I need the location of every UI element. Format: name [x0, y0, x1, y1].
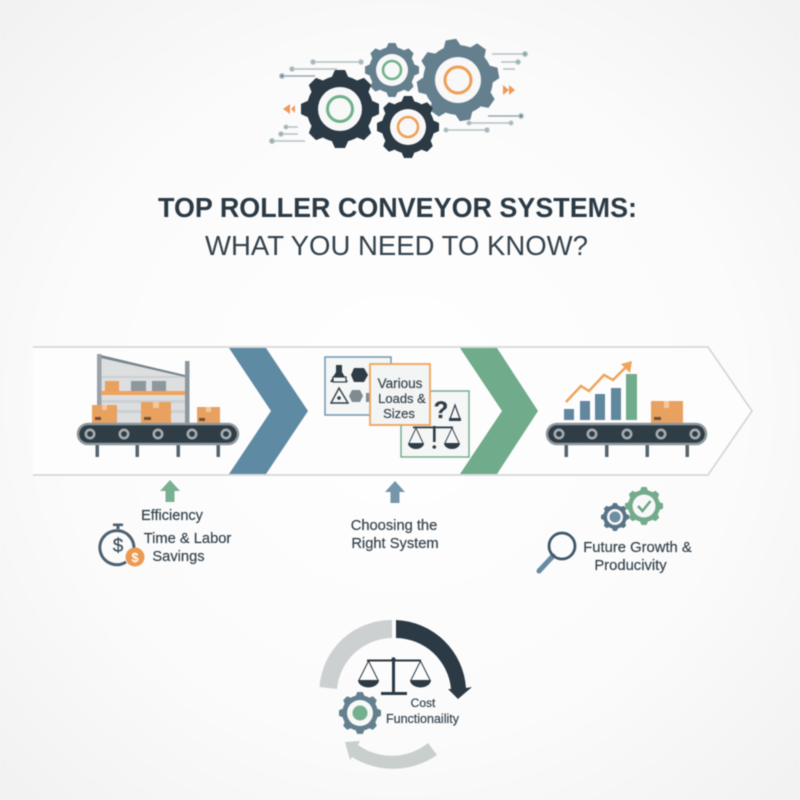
illustration: growth conveyor [547, 361, 706, 457]
text: choosing the right system [351, 518, 439, 552]
card: various loads and sizes: Loads & [378, 391, 426, 406]
title: WHAT YOU NEED TO KNOW? [205, 230, 588, 261]
gear: top middle [365, 43, 419, 97]
conveyor belt [78, 424, 238, 444]
gear: bottom dark [377, 96, 439, 158]
icon: orange arrows right [503, 85, 515, 95]
text: time and labor savings: Savings [152, 549, 205, 565]
text: time and labor savings [144, 531, 231, 565]
arrow: blue up [385, 481, 405, 503]
icon: balance scale [358, 657, 431, 695]
package [651, 401, 683, 423]
title: TOP ROLLER CONVEYOR SYSTEMS: [158, 192, 637, 223]
card: various loads and sizes: Various [378, 376, 423, 391]
arrow: growth trend [566, 361, 632, 402]
icon: magnifier [539, 533, 575, 571]
icon: stopwatch with coin [100, 524, 144, 566]
icon: stopwatch with coin: $ [113, 536, 124, 557]
arc: dark arrow [396, 620, 472, 699]
arrow: blue chevron [229, 348, 308, 474]
card: various loads and sizes [370, 364, 430, 425]
bar chart [564, 374, 637, 420]
text: efficiency: Efficiency [141, 508, 204, 524]
card: load shapes [325, 357, 391, 415]
shelf boxes [105, 381, 166, 391]
arc: grey upper [320, 620, 392, 689]
text: future growth and productivity: Producivity [594, 558, 667, 574]
icon: stopwatch with coin: $ [131, 550, 139, 565]
arrow: green chevron [460, 348, 538, 474]
floor boxes [92, 402, 220, 423]
illustration: warehouse conveyor [78, 354, 238, 457]
illustration: load and system cards [325, 357, 469, 457]
title [158, 192, 637, 261]
text: future growth and productivity [583, 540, 692, 574]
text: choosing the right system: Right System [351, 536, 439, 552]
card: balance and question: ? [434, 397, 448, 424]
text: cost functionality: Functionaility [386, 712, 460, 726]
arrow: green up [160, 480, 180, 502]
card: various loads and sizes: Sizes [383, 406, 415, 421]
text: cost functionality [386, 696, 460, 726]
icon: small blue gear [601, 503, 629, 531]
gear: left dark [301, 70, 379, 148]
conveyor legs [564, 445, 689, 457]
card: balance and question [401, 391, 469, 457]
icon: green gear with check [625, 487, 663, 525]
arc: grey lower arrow [345, 741, 437, 769]
conveyor legs [96, 445, 220, 457]
panel: process band [33, 347, 752, 475]
chart: cost functionality cycle [320, 620, 472, 769]
motion lines around gears [270, 52, 527, 143]
icon: orange arrows left [283, 104, 295, 114]
icon: gear [339, 692, 381, 734]
text: time and labor savings: Time & Labor [144, 531, 231, 547]
text: cost functionality: Cost [411, 696, 436, 710]
warehouse building [97, 354, 190, 424]
text: future growth and productivity: Future Growth & [583, 540, 692, 556]
conveyor belt [547, 424, 706, 444]
icon: interlocking gears [301, 33, 505, 158]
gear: right large [411, 33, 505, 127]
text: choosing the right system: Choosing the [351, 518, 437, 534]
